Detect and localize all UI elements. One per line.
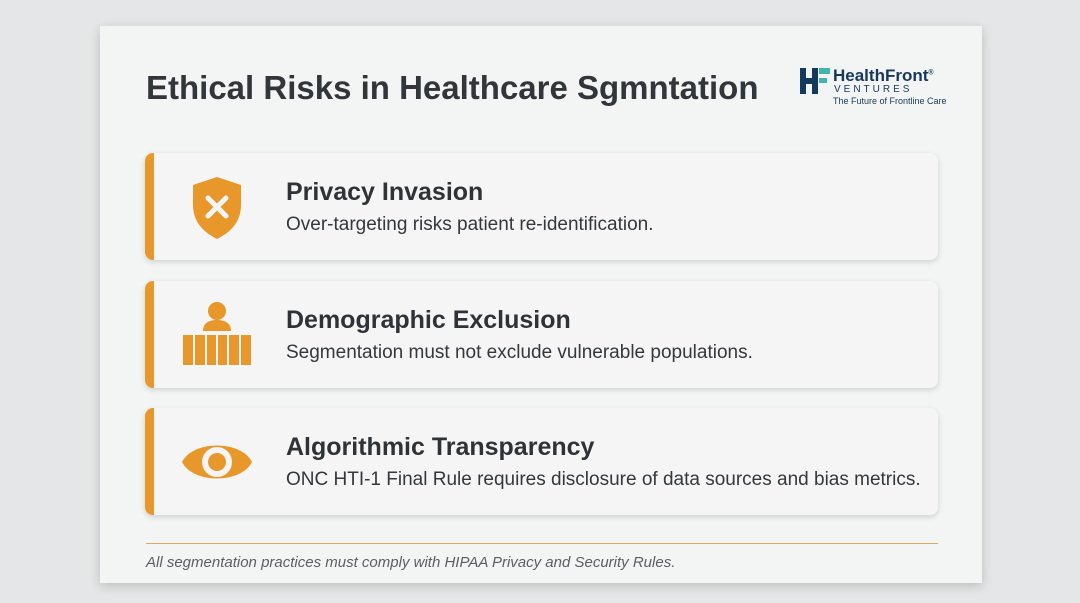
logo	[800, 66, 947, 106]
title: Ethical Risks in Healthcare Sgmntation	[146, 69, 758, 106]
icon: eye	[182, 446, 252, 478]
panel: demographic exclusion: Demographic Exclusion	[286, 306, 571, 334]
icon: person with fence	[183, 302, 251, 365]
logo: HealthFront®	[833, 66, 934, 85]
panel: demographic exclusion: Segmentation must not exclude vulnerable populations.	[286, 342, 753, 363]
panel: privacy invasion: Over-targeting risks patient re-identification.	[286, 214, 654, 235]
logo: The Future of Frontline Care	[833, 96, 947, 106]
panel: privacy invasion: Privacy Invasion	[286, 178, 483, 206]
icon: shield	[193, 177, 241, 239]
logo: VENTURES	[834, 84, 912, 95]
panel: algorithmic transparency: ONC HTI-1 Final Rule requires disclosure of data sources and bias metrics.	[286, 469, 921, 490]
panel: algorithmic transparency: Algorithmic Transparency	[286, 433, 594, 461]
card	[100, 26, 982, 583]
panel: algorithmic transparency	[145, 408, 938, 515]
footer note: All segmentation practices must comply with HIPAA Privacy and Security Rules.	[146, 554, 675, 571]
panel: privacy invasion	[145, 153, 938, 260]
panel: demographic exclusion	[145, 281, 938, 388]
